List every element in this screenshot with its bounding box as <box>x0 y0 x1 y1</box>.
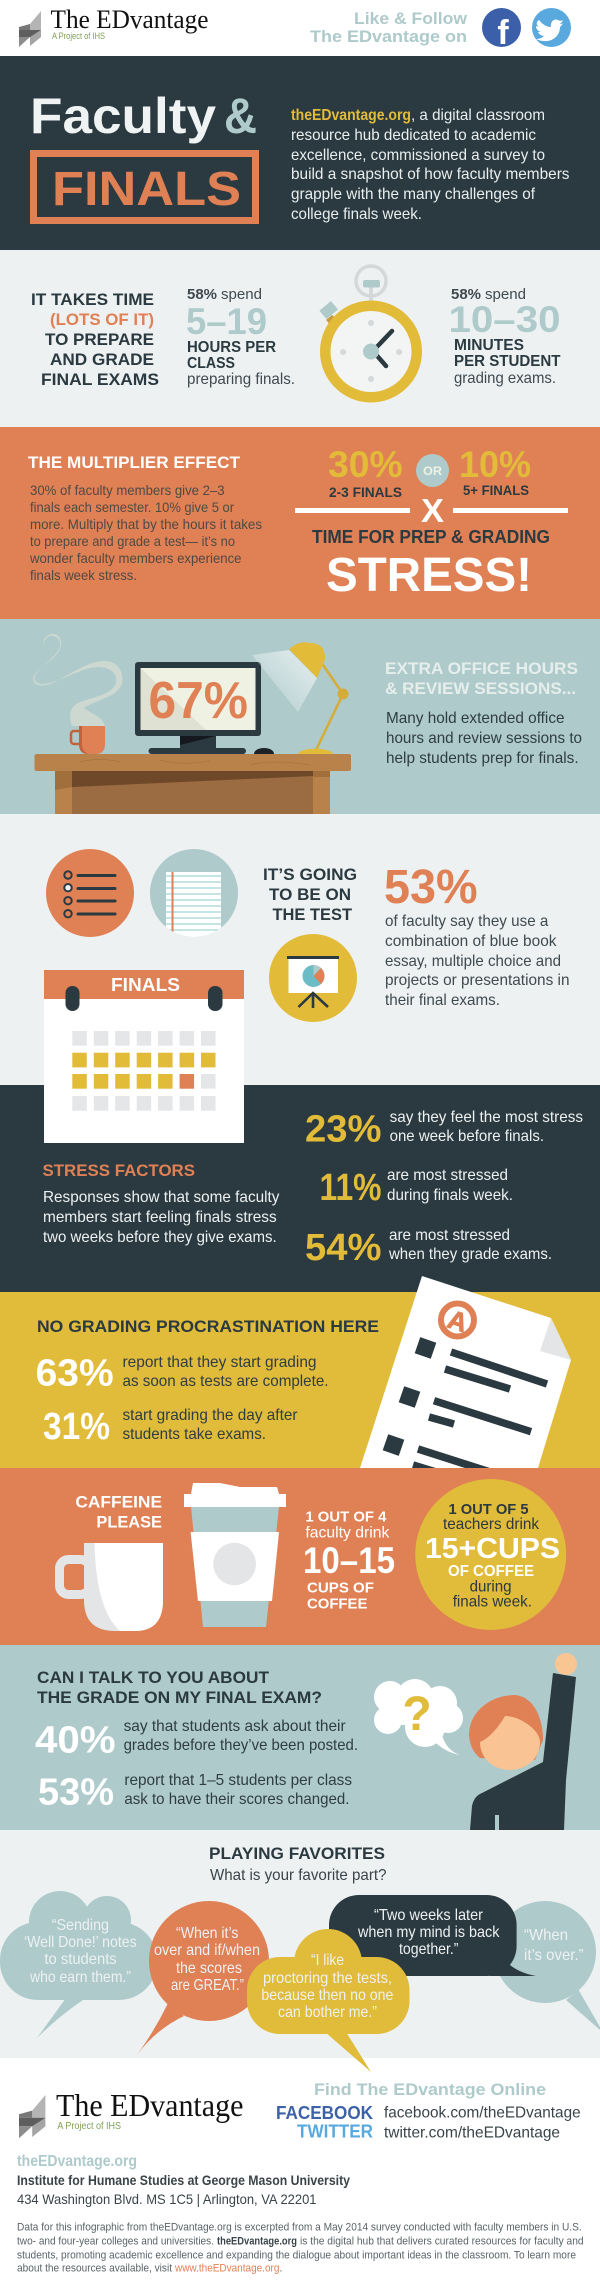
stat: 5-19 hours: 5–19 <box>186 301 267 342</box>
address block: theEDvantage.org <box>17 2153 137 2170</box>
speech bubble: cloud <box>0 1891 157 2038</box>
heading: playing favorites: PLAYING FAVORITES <box>209 1844 385 1863</box>
intro paragraph: grapple with the many challenges of <box>291 186 536 203</box>
social prompt: The EDvantage on <box>310 27 467 46</box>
intro paragraph: build a snapshot of how faculty members <box>291 166 570 183</box>
panel: header <box>0 0 600 56</box>
stat: 10%: 5+ FINALS <box>463 482 529 498</box>
twitter link: twitter.com/theEDvantage <box>384 2125 560 2142</box>
panel: multiplier effect <box>0 427 600 619</box>
stat: 11%: 11% <box>320 1167 382 1209</box>
multiplier paragraph <box>29 482 262 583</box>
speech bubble: orange <box>137 1901 269 2055</box>
icon: finals calendar <box>44 970 244 1143</box>
speech bubble: cloud: who earn them.” <box>29 1969 131 1986</box>
panel: caffeine <box>0 1468 600 1645</box>
fine print: is the digital hub that delivers curated resources for faculty and <box>300 2235 584 2247</box>
panel: grade questions <box>0 1645 600 1830</box>
heading: it takes time: (LOTS OF IT) <box>50 310 154 329</box>
stat: 11%: are most stressed <box>387 1167 508 1184</box>
stat: 30%: 2-3 FINALS <box>329 484 402 500</box>
icon: presentation <box>269 934 357 1022</box>
heading: can I talk to you: THE GRADE ON MY FINAL EXAM? <box>37 1688 322 1707</box>
stat: 53% <box>38 1772 352 1814</box>
fine print: . <box>279 2263 282 2275</box>
stress paragraph: Responses show that some faculty <box>43 1189 279 1206</box>
facebook link: facebook.com/theEDvantage <box>384 2105 581 2122</box>
speech bubble: orange: the scores <box>176 1960 242 1977</box>
stat: 31%: start grading the day after <box>122 1407 298 1424</box>
title: Faculty: Faculty <box>30 88 216 144</box>
panel: playing favorites <box>0 1830 600 2072</box>
heading: it takes time: IT TAKES TIME <box>31 290 154 309</box>
intro paragraph: excellence, commissioned a survey to <box>291 147 545 164</box>
speech bubble: dark: when my mind is back <box>357 1924 500 1941</box>
callout: 15+ cups: teachers drink <box>443 1516 540 1533</box>
facebook link <box>276 2103 581 2123</box>
stat: 54% <box>305 1227 552 1269</box>
icon: facebook: f <box>497 14 509 52</box>
speech bubble: orange: are GREAT.” <box>171 1977 244 1994</box>
office hours paragraph <box>386 710 582 767</box>
stress paragraph: two weeks before they give exams. <box>43 1229 277 1246</box>
multiplier paragraph: wonder faculty members experience <box>29 550 242 566</box>
stat: 5-19 hours: spend <box>221 286 262 303</box>
stat: 23%: one week before finals. <box>390 1128 544 1145</box>
stat: 23%: 23% <box>305 1109 382 1151</box>
panel: on the test <box>0 814 600 1143</box>
logo wordmark: The EDvantage <box>50 5 208 34</box>
stat: 10-15 cups <box>303 1509 395 1613</box>
icon: thought bubble with question mark <box>374 1679 463 1755</box>
twitter link: TWITTER <box>297 2122 373 2142</box>
stat: 10-30 minutes: 58% <box>451 286 481 303</box>
icon: mug <box>71 726 105 754</box>
multiply sign with rules <box>295 492 568 529</box>
speech bubble: yellow: because then no one <box>261 1987 393 2004</box>
multiplier paragraph: finals each semester. 10% give 5 or <box>30 499 234 515</box>
speech bubble: far right: “When <box>524 1927 568 1944</box>
heading: caffeine please: CAFFEINE <box>75 1493 162 1512</box>
callout: 15+ cups: during <box>470 1579 512 1596</box>
stress headline: STRESS! <box>326 549 532 602</box>
stat: 53%: ask to have their scores changed. <box>124 1791 349 1808</box>
stat: 23% <box>305 1109 583 1151</box>
speech bubble: yellow: “I like <box>311 1952 344 1969</box>
social prompt <box>310 9 468 46</box>
speech bubble: dark: together.” <box>399 1941 458 1958</box>
speech bubble: yellow <box>247 1929 410 2072</box>
heading: it's going to be on the test: TO BE ON <box>269 885 351 904</box>
stat: 10-30 minutes: grading exams. <box>454 370 556 387</box>
OR badge <box>416 454 449 487</box>
heading: extra office hours: & REVIEW SESSIONS... <box>385 679 576 698</box>
stat: 11% <box>320 1167 513 1209</box>
heading: it's going to be on the test: THE TEST <box>272 905 353 924</box>
stat: 5-19 hours: 58% <box>187 286 217 303</box>
speech bubble: dark <box>329 1895 536 1976</box>
speech bubble: cloud: “Sending <box>52 1917 109 1934</box>
stat: 31%: students take exams. <box>122 1426 266 1443</box>
stat: 31% <box>43 1406 298 1448</box>
title: FINALS box <box>34 154 256 220</box>
test paragraph: projects or presentations in <box>385 972 570 989</box>
callout: 15+ cups <box>415 1479 566 1630</box>
stat: 10-15 cups: 1 OUT OF 4 <box>305 1509 387 1526</box>
stat: 53%: 53% <box>38 1772 114 1814</box>
heading: no grading procrastination: NO GRADING PROCRASTINATION HERE <box>37 1317 379 1336</box>
facebook link: FACEBOOK <box>276 2103 373 2123</box>
stat: 53%: report that 1–5 students per class <box>124 1772 352 1789</box>
icon: thought bubble with question mark: ? <box>402 1688 432 1741</box>
speech bubble: cloud: ‘Well Done!’ notes <box>24 1934 137 1951</box>
twitter link <box>297 2122 560 2142</box>
heading: it's going to be on the test: IT’S GOING <box>263 865 357 884</box>
callout: 15+ cups: 15+CUPS <box>425 1533 560 1565</box>
test paragraph: of faculty say they use a <box>385 913 548 930</box>
heading: extra office hours <box>385 659 578 698</box>
subheading: What is your favorite part? <box>210 1867 387 1884</box>
heading: it's going to be on the test <box>263 865 357 924</box>
speech bubble: yellow: can bother me.” <box>278 2004 377 2021</box>
logo tagline: A Project of IHS <box>52 31 105 42</box>
multiplier paragraph: finals week stress. <box>30 567 137 583</box>
speech bubble: cloud: to students <box>44 1951 117 1968</box>
fine print: about the resources available, visit <box>17 2263 172 2275</box>
stat: 31%: 31% <box>43 1406 110 1448</box>
stat: 10-30 minutes: 10–30 <box>448 299 560 340</box>
stat: 5-19 hours: HOURS PER <box>187 339 276 356</box>
panel: it takes time <box>0 250 600 427</box>
test paragraph: essay, multiple choice and <box>385 953 561 970</box>
heading: caffeine please: PLEASE <box>96 1513 162 1532</box>
stat: 63% <box>36 1353 328 1395</box>
panel: title <box>0 56 600 250</box>
social prompt: Like & Follow <box>354 9 468 28</box>
speech bubble: far right <box>494 1901 600 2030</box>
title: FINALS box: FINALS <box>52 163 241 216</box>
icon: notebook paper <box>150 849 238 937</box>
stat: 63%: report that they start grading <box>122 1354 316 1371</box>
test paragraph <box>385 913 570 1009</box>
fine print: theEDvantage.org <box>217 2235 297 2247</box>
stat: 30%: 30% <box>328 444 403 485</box>
test paragraph: combination of blue book <box>385 933 557 950</box>
intro paragraph <box>291 107 570 223</box>
stat: 54%: 54% <box>305 1227 382 1269</box>
address block <box>17 2153 350 2207</box>
stat: 54%: when they grade exams. <box>388 1246 552 1263</box>
stat: 5-19 hours: CLASS <box>187 355 235 372</box>
fine print: www.theEDvantage.org <box>174 2263 279 2275</box>
stat: 63%: 63% <box>36 1353 114 1395</box>
stat: 10-30 minutes: spend <box>485 286 526 303</box>
heading: it takes time: AND GRADE <box>50 350 154 369</box>
stat: 10-15 cups: CUPS OF <box>307 1580 374 1597</box>
stat: 10-30 minutes: MINUTES <box>454 337 524 354</box>
icon: stopwatch <box>319 266 422 402</box>
intro paragraph: theEDvantage.org <box>291 107 411 124</box>
speech bubble: far right: it’s over.” <box>524 1947 584 1964</box>
logo wordmark: The EDvantage <box>56 2087 243 2123</box>
office hours paragraph: Many hold extended office <box>386 710 565 727</box>
callout: 15+ cups: finals week. <box>453 1594 532 1611</box>
OR badge: OR <box>423 464 442 478</box>
multiplier paragraph: to prepare and grade a test— it’s no <box>30 533 235 549</box>
title: ampersand: & <box>224 88 257 144</box>
stat: 10-15 cups: faculty drink <box>305 1525 390 1542</box>
panel: no grading procrastination <box>0 1276 600 1472</box>
stat: 11%: during finals week. <box>387 1187 513 1204</box>
icon: computer monitor with 67%: 67% <box>148 672 248 730</box>
icon: computer mouse <box>254 748 274 754</box>
intro paragraph: , a digital classroom <box>411 107 545 124</box>
icon: EDvantage logo mark <box>19 11 41 47</box>
stat: 40%: grades before they’ve been posted. <box>124 1737 358 1754</box>
icon: desk <box>34 754 351 814</box>
stat: 5-19 hours: preparing finals. <box>187 371 295 388</box>
speech bubble: yellow: proctoring the tests, <box>263 1970 392 1987</box>
heading: it takes time: TO PREPARE <box>45 330 154 349</box>
stat: 5-19 hours <box>186 286 295 388</box>
icon: desk lamp <box>252 642 348 754</box>
fine print <box>17 2222 584 2275</box>
address block: Institute for Humane Studies at George Mason University <box>17 2172 350 2188</box>
icon: graded test paper <box>360 1276 571 1472</box>
stat: 53%: 53% <box>384 861 478 914</box>
stat: 40% <box>35 1718 358 1762</box>
icon: student raising hand <box>469 1653 577 1830</box>
panel: office hours <box>0 619 600 814</box>
stat: 10-30 minutes: PER STUDENT <box>454 353 561 370</box>
logo tagline: A Project of IHS <box>57 2120 121 2132</box>
panel: stress factors <box>0 1085 600 1292</box>
heading: find online: Find The EDvantage Online <box>314 2080 546 2099</box>
intro paragraph: resource hub dedicated to academic <box>291 127 536 144</box>
icon: steam <box>33 634 122 726</box>
callout: 15+ cups: 1 OUT OF 5 <box>448 1501 528 1518</box>
stat: 10-15 cups: COFFEE <box>307 1596 367 1613</box>
office hours paragraph: hours and review sessions to <box>386 730 582 747</box>
stat: 10%: 10% <box>459 444 531 485</box>
stat: 54%: are most stressed <box>389 1227 510 1244</box>
stress paragraph <box>43 1189 279 1246</box>
stat: 10-15 cups: 10–15 <box>303 1540 395 1581</box>
stat: 40%: say that students ask about their <box>124 1718 346 1735</box>
speech bubble: orange: “When it’s <box>176 1925 238 1942</box>
icon: computer monitor with 67% <box>135 662 261 754</box>
office hours paragraph: help students prep for finals. <box>386 750 579 767</box>
icon: to-go cup <box>184 1483 286 1627</box>
heading: extra office hours: EXTRA OFFICE HOURS <box>385 659 578 678</box>
multiply sign with rules: X <box>421 492 444 529</box>
stat: 40%: 40% <box>35 1720 116 1762</box>
fine print: two- and four-year colleges and universities. <box>17 2235 214 2247</box>
icon: finals calendar: FINALS <box>111 975 180 995</box>
stat: 10-30 minutes <box>448 286 561 387</box>
heading: it takes time <box>31 290 159 389</box>
heading: stress factors: STRESS FACTORS <box>42 1161 195 1180</box>
heading: it takes time: FINAL EXAMS <box>41 370 159 389</box>
icon: coffee mug <box>60 1543 163 1631</box>
icon: multiple choice list <box>46 849 134 937</box>
icon: facebook <box>482 8 521 52</box>
icon: graded test paper: A <box>444 1304 471 1338</box>
stat: 23%: say they feel the most stress <box>390 1109 583 1126</box>
speech bubble: dark: “Two weeks later <box>374 1907 484 1924</box>
test paragraph: their final exams. <box>385 992 500 1009</box>
icon: EDvantage logo mark <box>19 2095 45 2138</box>
intro paragraph: college finals week. <box>291 206 422 223</box>
stress paragraph: members start feeling finals stress <box>43 1209 277 1226</box>
heading: can I talk to you: CAN I TALK TO YOU ABOUT <box>37 1668 270 1687</box>
multiplier paragraph: 30% of faculty members give 2–3 <box>30 482 225 498</box>
heading: multiplier effect: THE MULTIPLIER EFFECT <box>28 453 241 472</box>
stat: 63%: as soon as tests are complete. <box>122 1373 328 1390</box>
label: time for prep and grading: TIME FOR PREP & GRADING <box>312 527 550 547</box>
icon: twitter <box>532 8 571 47</box>
address block: 434 Washington Blvd. MS 1C5 | Arlington, VA 22201 <box>17 2191 317 2207</box>
multiplier paragraph: more. Multiply that by the hours it takes <box>30 516 262 532</box>
panel: footer <box>0 2058 600 2288</box>
speech bubble: orange: over and if/when <box>154 1942 260 1959</box>
heading: caffeine please <box>75 1493 162 1532</box>
heading: can I talk to you <box>37 1668 322 1707</box>
callout: 15+ cups: OF COFFEE <box>448 1563 534 1580</box>
